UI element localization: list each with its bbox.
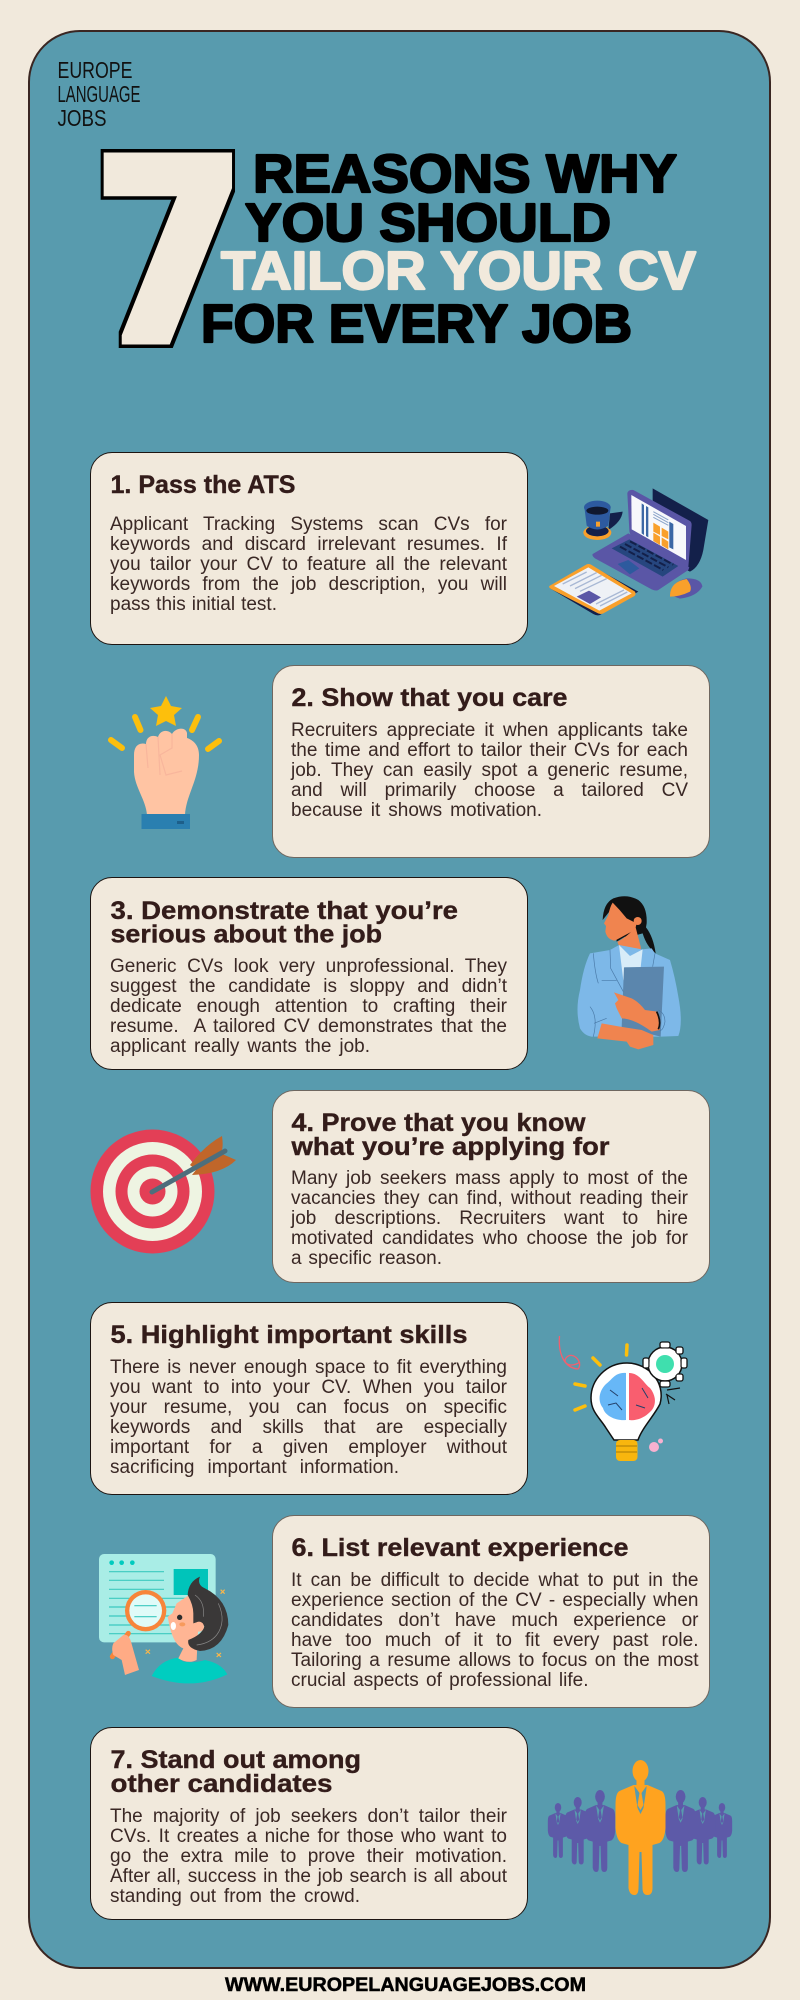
text: reason 5: There is never enough space to fit everything: [110, 1357, 507, 1378]
text: reason 6: [291, 1570, 698, 1691]
text: reason 1: you tailor your CV to feature all the relevant: [110, 554, 507, 575]
heading: reason 4: [290, 1109, 610, 1161]
title: FOR EVERY JOB: [201, 295, 632, 354]
text: reason 1: [110, 514, 508, 615]
icon: light bulb with brain and gear: [559, 1336, 687, 1461]
heading: reason 7: other candidates: [110, 1770, 332, 1798]
logo: JOBS: [58, 105, 106, 131]
heading: reason 5: 5. Highlight important skills: [110, 1320, 467, 1348]
text: reason 1: Applicant Tracking Systems scan CVs for: [110, 514, 507, 535]
icon: person inspecting a CV with magnifier: [99, 1554, 228, 1683]
text: reason 5: important for a given employer without: [110, 1437, 507, 1458]
text: reason 6: It can be difficult to decide what to put in the: [291, 1570, 698, 1591]
heading: reason 1: 1. Pass the ATS: [110, 470, 295, 498]
panel: reason 2: [272, 664, 710, 858]
title: TAILOR YOUR CV: [221, 242, 696, 301]
text: reason 6: crucial aspects of professional life.: [291, 1670, 588, 1691]
heading: reason 7: [110, 1746, 360, 1798]
text: reason 6: Tailoring a resume allows to focus on the most: [291, 1650, 698, 1671]
text: reason 3: suggest the candidate is sloppy and didn’t: [110, 976, 507, 997]
icon: woman holding folder: [577, 896, 681, 1049]
text: reason 7: The majority of job seekers don’t tailor their: [110, 1806, 507, 1827]
text: reason 5: your resume, you can focus on specific: [110, 1397, 507, 1418]
panel: reason 4: [272, 1090, 710, 1282]
text: reason 4: a specific reason.: [291, 1248, 442, 1269]
text: reason 4: Many job seekers mass apply to most of the: [291, 1168, 688, 1189]
logo: [58, 57, 140, 131]
text: reason 7: go the extra mile to prove their motivation.: [110, 1846, 507, 1867]
logo: EUROPE: [58, 57, 132, 83]
text: reason 6: have too much of it to fit every past role.: [291, 1630, 698, 1651]
footer website: WWW.EUROPELANGUAGEJOBS.COM: [225, 1975, 586, 1996]
panel: reason 6: [272, 1514, 710, 1708]
text: reason 3: dedicate enough attention to crafting their: [110, 996, 507, 1017]
text: reason 2: job. They can easily spot a generic resume,: [291, 760, 688, 781]
text: reason 3: Generic CVs look very unprofessional. They: [110, 956, 507, 977]
text: reason 7: After all, success in the job search is all about: [110, 1866, 507, 1887]
big number seven: 7: [93, 107, 245, 400]
text: reason 1: pass this initial test.: [110, 594, 277, 615]
text: reason 2: and will primarily choose a tailored CV: [291, 780, 688, 801]
text: reason 5: sacrificing important information.: [110, 1457, 399, 1478]
text: reason 2: the time and effort to tailor their CVs for each: [291, 740, 688, 761]
icon: laptop, mug and tablet: [549, 488, 708, 615]
title: YOU SHOULD: [245, 194, 611, 253]
text: reason 2: [290, 720, 688, 821]
heading: reason 4: what you’re applying for: [290, 1133, 609, 1161]
icon: group of people with one standing out: [548, 1760, 732, 1895]
text: reason 1: keywords and discard irrelevant resumes. If: [110, 534, 507, 555]
logo: LANGUAGE: [58, 81, 140, 107]
text: reason 7: [110, 1806, 507, 1907]
panel: reason 1: [90, 452, 528, 645]
text: reason 4: [290, 1168, 688, 1269]
panel: reason 5: [90, 1302, 528, 1495]
text: reason 4: motivated candidates who choose the job for: [291, 1228, 688, 1249]
heading: reason 3: serious about the job: [110, 920, 382, 948]
heading: reason 2: 2. Show that you care: [291, 684, 567, 712]
title: [201, 145, 696, 354]
text: reason 2: Recruiters appreciate it when applicants take: [291, 720, 688, 741]
text: reason 5: keywords and skills that are especially: [110, 1417, 507, 1438]
text: reason 1: keywords from the job description, you will: [110, 574, 507, 595]
heading: reason 7: 7. Stand out among: [110, 1746, 360, 1774]
heading: reason 3: [110, 896, 458, 948]
title: REASONS WHY: [253, 145, 677, 204]
text: reason 2: because it shows motivation.: [291, 800, 542, 821]
heading: reason 6: 6. List relevant experience: [291, 1534, 628, 1562]
heading: reason 3: 3. Demonstrate that you’re: [110, 896, 458, 924]
text: reason 7: CVs. It creates a niche for those who want to: [110, 1826, 507, 1847]
text: reason 5: [110, 1357, 507, 1478]
text: reason 4: vacancies they can find, without reading their: [291, 1188, 688, 1209]
text: reason 3: resume. A tailored CV demonstrates that the: [110, 1016, 507, 1037]
text: reason 6: experience section of the CV - especially when: [291, 1590, 698, 1611]
text: reason 4: job descriptions. Recruiters want to hire: [291, 1208, 688, 1229]
text: reason 3: applicant really wants the job.: [110, 1036, 370, 1057]
icon: target with arrow: [90, 1130, 236, 1254]
text: reason 6: candidates don’t have much experience or: [291, 1610, 698, 1631]
icon: raised fist with star: [111, 696, 219, 829]
text: reason 5: you want to into your CV. When you tailor: [110, 1377, 507, 1398]
panel: reason 7: [90, 1727, 528, 1920]
heading: reason 4: 4. Prove that you know: [291, 1109, 586, 1137]
text: reason 7: standing out from the crowd.: [110, 1886, 360, 1907]
panel: reason 3: [90, 877, 528, 1070]
text: reason 3: [110, 956, 507, 1057]
